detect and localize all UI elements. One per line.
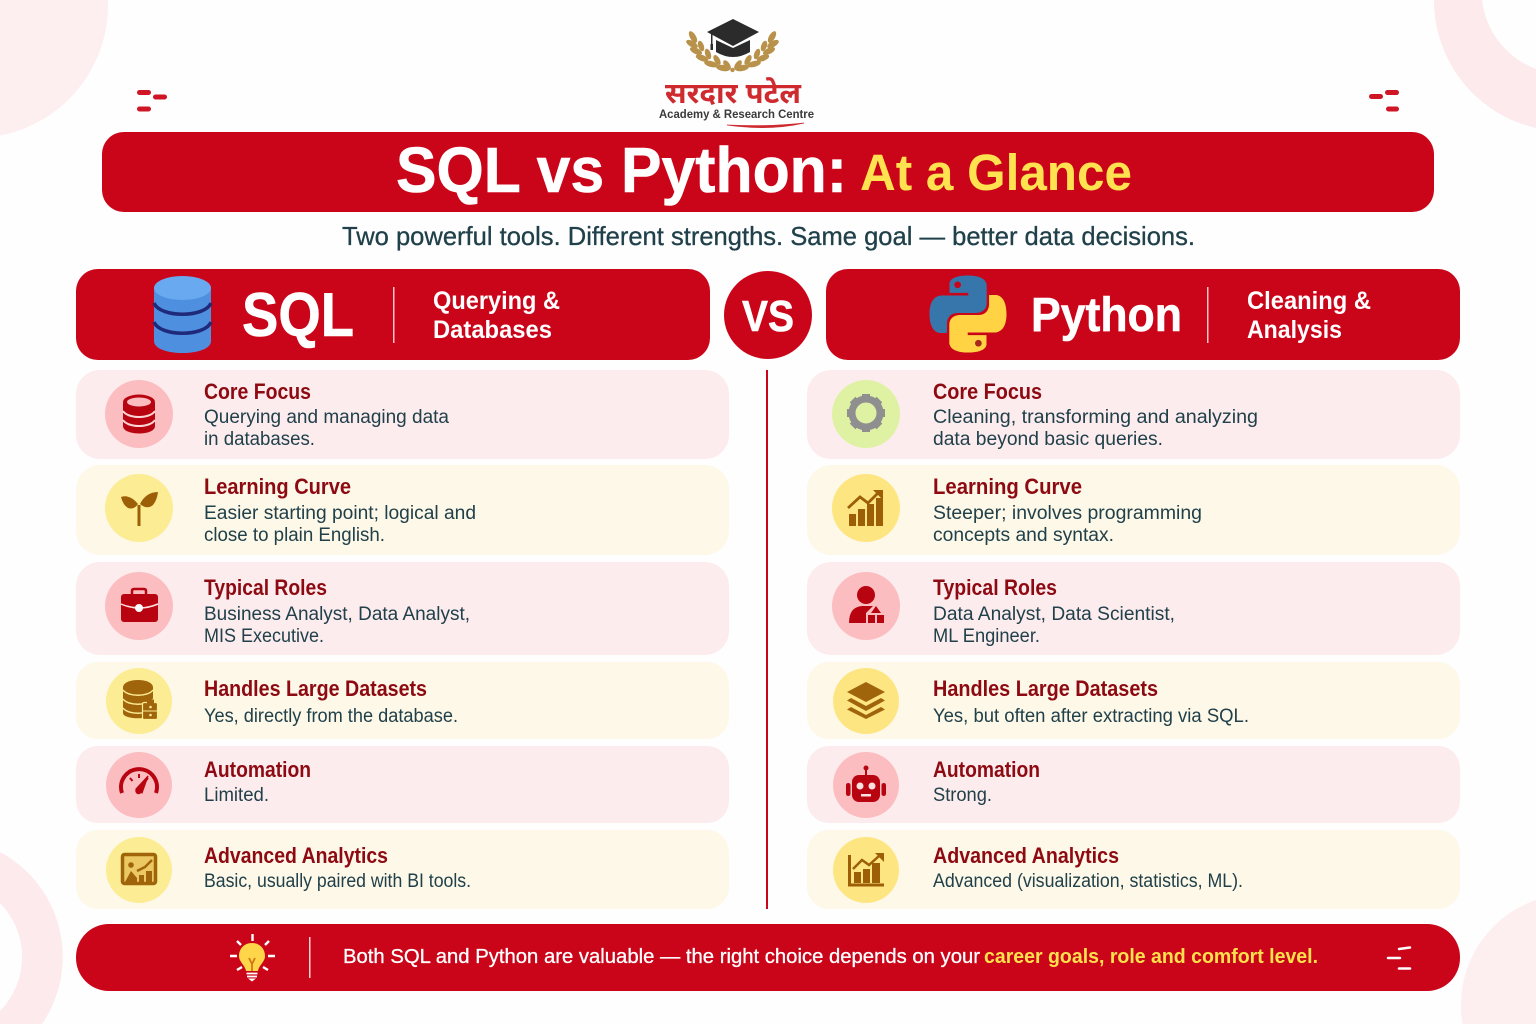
- description: [204, 604, 470, 647]
- SQL descriptor: Querying &: [433, 287, 560, 315]
- SQL label: SQL: [242, 281, 354, 350]
- icon: laurel wreath: [685, 30, 780, 72]
- panel: Python Typical Roles: [807, 562, 1460, 655]
- description: Querying and managing data: [204, 407, 449, 428]
- logo: [659, 19, 814, 128]
- description: Strong.: [933, 785, 992, 806]
- description: concepts and syntax.: [933, 525, 1114, 546]
- description: ML Engineer.: [933, 626, 1040, 647]
- panel: Python Core Focus: [807, 370, 1460, 459]
- Python descriptor: [1247, 287, 1371, 344]
- description: data beyond basic queries.: [933, 429, 1163, 450]
- panel: SQL Core Focus: [76, 370, 729, 459]
- icon: speedometer: [121, 769, 157, 794]
- corner decoration: top right: [1434, 0, 1536, 128]
- icon: SQL database cylinder: [154, 276, 211, 353]
- description: Steeper; involves programming: [933, 503, 1202, 524]
- heading: Core Focus: [933, 379, 1042, 404]
- description: Advanced (visualization, statistics, ML).: [933, 871, 1243, 892]
- VS badge: VS: [742, 292, 794, 341]
- SQL descriptor: [433, 287, 560, 344]
- panel: SQL Typical Roles: [76, 562, 729, 655]
- icon: robot: [846, 766, 886, 802]
- icon: light bulb: [230, 934, 275, 982]
- footer highlight: career goals, role and comfort level.: [984, 945, 1318, 968]
- SQL descriptor: Databases: [433, 316, 552, 344]
- Python descriptor: Analysis: [1247, 316, 1342, 344]
- corner decoration: bottom left: [0, 852, 63, 1024]
- title text: SQL vs Python:: [396, 134, 847, 206]
- description: [933, 503, 1202, 546]
- description: Cleaning, transforming and analyzing: [933, 407, 1258, 428]
- panel: SQL Automation: [76, 746, 729, 823]
- description: Yes, but often after extracting via SQL.: [933, 706, 1249, 727]
- description: Business Analyst, Data Analyst,: [204, 604, 470, 625]
- panel: Python Advanced Analytics: [807, 830, 1460, 909]
- title highlight: At a Glance: [860, 144, 1132, 201]
- description: Basic, usually paired with BI tools.: [204, 871, 471, 892]
- heading: Learning Curve: [933, 474, 1082, 499]
- heading: Typical Roles: [204, 575, 327, 600]
- description: MIS Executive.: [204, 626, 324, 647]
- SQL header: [76, 269, 710, 360]
- panel: SQL Handles Large Datasets: [76, 662, 729, 739]
- VS badge: [724, 271, 812, 359]
- description: close to plain English.: [204, 525, 385, 546]
- icon: person with blocks: [849, 586, 884, 623]
- description: Limited.: [204, 785, 269, 806]
- logo subtitle: Academy & Research Centre: [659, 107, 814, 121]
- panel: Python Automation: [807, 746, 1460, 823]
- icon: Python logo: [930, 276, 1006, 352]
- description: in databases.: [204, 429, 315, 450]
- icon: graduation cap: [707, 19, 759, 57]
- title banner: [102, 132, 1434, 212]
- heading: Learning Curve: [204, 474, 351, 499]
- heading: Handles Large Datasets: [204, 676, 427, 701]
- accent dashes footer: [1388, 948, 1410, 968]
- icon: growth chart: [848, 490, 883, 526]
- heading: Automation: [933, 757, 1040, 782]
- icon: analytics board: [122, 854, 156, 884]
- icon: briefcase: [121, 589, 158, 622]
- Python descriptor: Cleaning &: [1247, 287, 1371, 315]
- panel: SQL Advanced Analytics: [76, 830, 729, 909]
- icon: database: [123, 394, 155, 434]
- icon: sprout: [121, 492, 158, 526]
- icon: layers: [847, 682, 885, 719]
- panel: SQL Learning Curve: [76, 465, 729, 555]
- panel: Python Handles Large Datasets: [807, 662, 1460, 739]
- footer banner: [76, 924, 1460, 991]
- description: [933, 407, 1258, 450]
- description: Easier starting point; logical and: [204, 503, 476, 524]
- accent dashes right: [1369, 90, 1399, 112]
- panel: Python Learning Curve: [807, 465, 1460, 555]
- footer message: Both SQL and Python are valuable — the right choice depends on your: [343, 945, 980, 968]
- heading: Automation: [204, 757, 311, 782]
- corner decoration: top left: [0, 0, 108, 136]
- description: [204, 503, 476, 546]
- Python label: Python: [1031, 289, 1182, 342]
- description: [933, 604, 1175, 647]
- subtitle: Two powerful tools. Different strengths. Same goal — better data decisions.: [342, 221, 1195, 251]
- description: Data Analyst, Data Scientist,: [933, 604, 1175, 625]
- logo name in Devanagari: सरदार पटेल: [665, 76, 802, 110]
- icon: database with lock: [123, 680, 158, 720]
- heading: Core Focus: [204, 379, 311, 404]
- accent dashes left: [137, 90, 167, 112]
- description: Yes, directly from the database.: [204, 706, 458, 727]
- description: [204, 407, 449, 450]
- heading: Handles Large Datasets: [933, 676, 1158, 701]
- Python header: [826, 269, 1460, 360]
- heading: Advanced Analytics: [933, 843, 1119, 868]
- heading: Advanced Analytics: [204, 843, 388, 868]
- heading: Typical Roles: [933, 575, 1057, 600]
- icon: bar and line chart: [850, 853, 884, 885]
- icon: gear: [847, 394, 885, 432]
- corner decoration: bottom right: [1461, 900, 1536, 1024]
